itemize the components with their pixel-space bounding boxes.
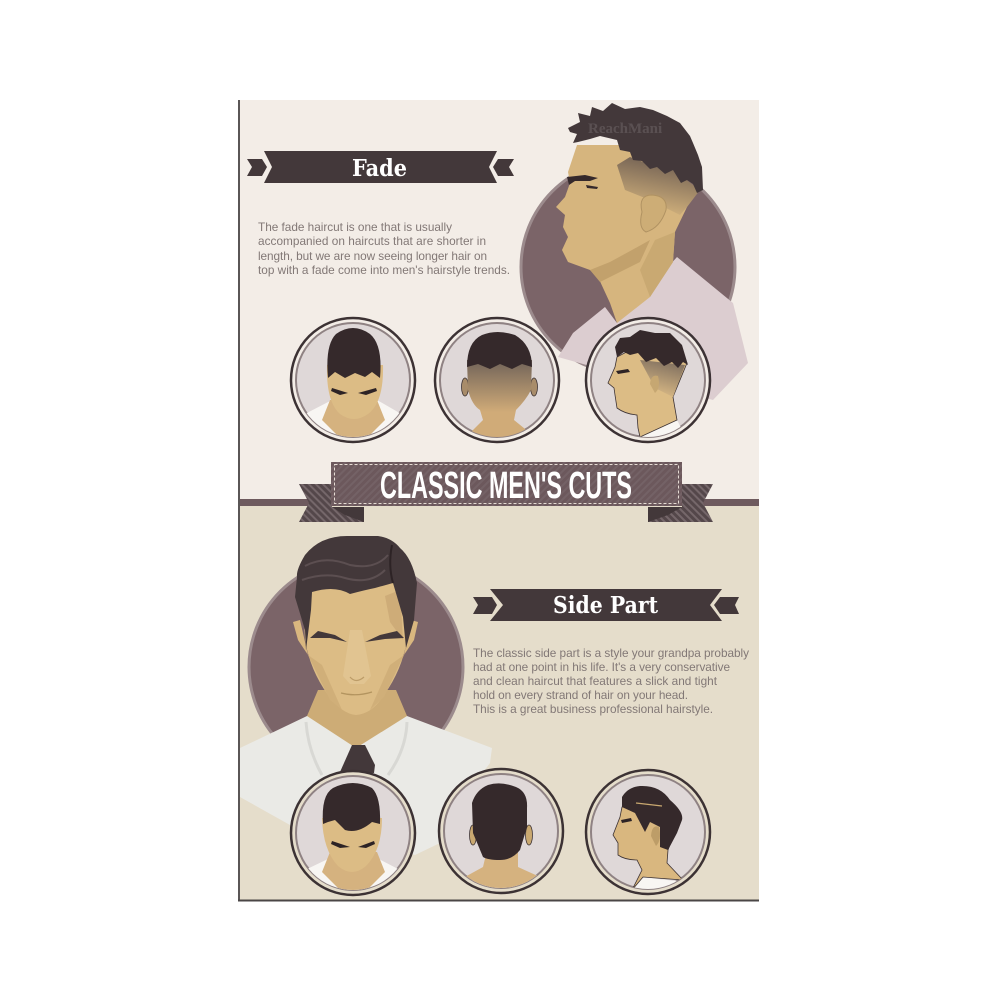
hair: [568, 103, 703, 193]
fade side view: [586, 318, 710, 445]
text block: side part description: and clean haircut that features a slick and tight: [473, 674, 718, 688]
text block: side part description: hold on every strand of hair on your head.: [473, 688, 688, 702]
portrait backdrop circle: [249, 560, 463, 774]
text block: fade description: accompanied on haircuts that are shorter in: [258, 234, 486, 248]
text block: side part description: This is a great business professional hairstyle.: [473, 702, 713, 716]
panel: side part portrait: [240, 536, 492, 855]
side part ribbon: [473, 589, 739, 621]
eyebrow and eye: [567, 175, 598, 189]
text block: fade description: The fade haircut is one that is usually: [258, 220, 452, 234]
text block: side part description: The classic side part is a style your grandpa probably: [473, 646, 749, 660]
portrait backdrop circle: [521, 160, 735, 374]
text block: side part description: had at one point in his life. It's a very conservative: [473, 660, 730, 674]
eyebrows: [310, 631, 404, 642]
heading: side part: Side Part: [553, 592, 658, 619]
collar shadow: [306, 722, 407, 775]
mouth and chin lines: [341, 692, 372, 695]
face: [303, 575, 408, 715]
fade ribbon: [247, 151, 514, 183]
fade front view: [291, 318, 415, 445]
side part back view: [439, 769, 563, 900]
hair: [295, 536, 417, 650]
panel: fade portrait: [521, 103, 748, 400]
ear: [641, 195, 666, 232]
text block: fade description: length, but we are now seeing longer hair on: [258, 249, 487, 263]
right tail: [648, 484, 713, 522]
text block: side part description: [473, 646, 749, 716]
neck: [307, 690, 407, 748]
necktie: [340, 745, 375, 773]
banner body: [331, 462, 682, 506]
hair fade: [617, 157, 700, 215]
heading: classic men's cuts: CLASSIC MEN'S CUTS: [380, 465, 632, 507]
left tail: [299, 484, 364, 522]
main title banner: [299, 462, 713, 522]
ears: [293, 620, 308, 655]
white shirt: [240, 716, 492, 855]
panel: fade portrait: ReachMani: [588, 121, 662, 137]
heading: Fade: Fade: [352, 155, 407, 182]
neck and face: [556, 145, 695, 323]
shirt: [558, 257, 748, 400]
fade back view: [435, 318, 559, 445]
text block: fade description: [258, 220, 510, 277]
text block: fade description: top with a fade come into men's hairstyle trends.: [258, 263, 510, 277]
side part front view: [291, 771, 415, 900]
side part side view: [586, 770, 710, 900]
poster background: [238, 100, 759, 902]
